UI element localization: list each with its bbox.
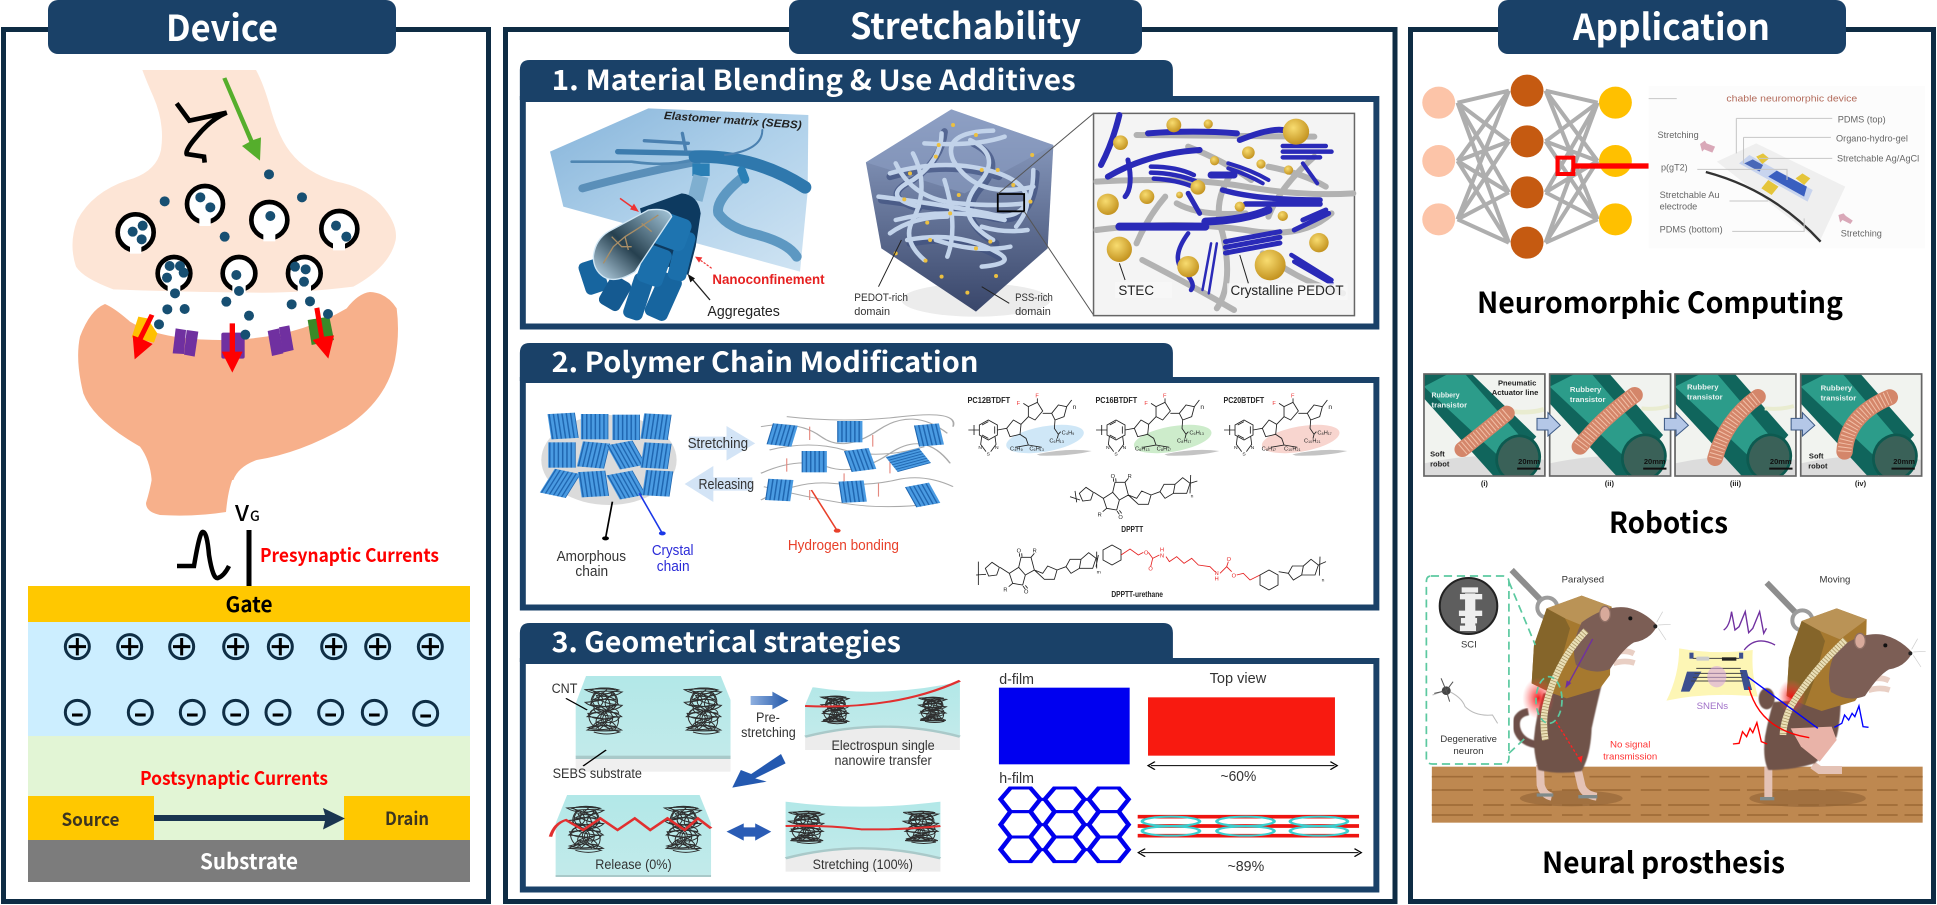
figure: crystalline PEDOT inset (1094, 113, 1354, 316)
photo iii (1675, 374, 1797, 486)
PC atoms: C₄H₉ (1010, 447, 1023, 453)
process labels: stretching (741, 724, 796, 740)
PC atoms: N (1123, 445, 1127, 451)
PC atoms: S (987, 452, 991, 458)
label: crystal chain: Crystal (652, 543, 694, 559)
film labels: d-film (999, 672, 1034, 688)
rat figure labels: Paralysed (1562, 574, 1604, 584)
layer: gate: Gate (226, 589, 272, 619)
DPPTT urethane: O (1227, 557, 1232, 563)
DPPTT urethane: N (1160, 553, 1164, 559)
rat figure labels: No signal (1610, 740, 1650, 750)
layer: substrate (28, 840, 470, 882)
signal traces and arrows (1724, 612, 1869, 744)
figure: film comparison (999, 688, 1361, 862)
heading: neuromorphic computing: Neuromorphic Computing (1477, 280, 1843, 322)
robot labels: Rubbery (1570, 385, 1602, 394)
label: postsynaptic currents: Postsynaptic Currents (140, 764, 328, 791)
panel: device (4, 0, 488, 902)
PC atoms: C₄H₉ (1062, 430, 1074, 436)
label: SEBS: Elastomer matrix (SEBS) (664, 110, 802, 132)
PC atoms: N (995, 445, 999, 451)
rat: paralysed (1512, 570, 1671, 797)
heading: device: Device (166, 0, 278, 52)
rat: moving (1759, 583, 1926, 799)
robot labels: 20mm (1518, 457, 1540, 466)
heading: robotics: Robotics (1609, 500, 1728, 542)
DPPTT urethane (976, 545, 1326, 595)
SCI inset: SCI (1461, 640, 1477, 650)
robot labels: Rubbery (1432, 390, 1460, 399)
figure: PEDOT cube (866, 109, 1094, 317)
figure: stretchable neuromorphic device: Stretching (1841, 228, 1882, 238)
figure: polymer structures (968, 394, 1347, 595)
photo i (1424, 374, 1546, 487)
PC atoms: S (1114, 452, 1118, 458)
robot labels: transistor (1570, 395, 1606, 404)
labels: polymer names: DPPTT-urethane (1111, 590, 1163, 599)
robot labels: Pneumatic (1498, 378, 1536, 387)
figure: neural prosthesis (1426, 570, 1926, 823)
labels: polymer names: DPPTT (1121, 525, 1143, 534)
robot labels: (i) (1481, 479, 1488, 488)
process labels: CNT (552, 680, 578, 696)
cations (65, 635, 442, 659)
label: presynaptic currents: Presynaptic Currents (260, 541, 439, 568)
robot labels: Rubbery (1687, 382, 1719, 391)
robot labels: (iv) (1855, 479, 1867, 488)
DPPTT urethane: R (1033, 549, 1037, 555)
heading: application: Application (1572, 0, 1770, 51)
arrows: red ion flow (133, 307, 334, 373)
labels: polymer names: PC20BTDFT (1224, 396, 1264, 405)
DPPTT urethane: R (1003, 588, 1007, 594)
figure: stretchable neuromorphic device: Stretching (1658, 130, 1699, 140)
film labels: h-film (999, 771, 1034, 787)
DPPTT: n (1191, 494, 1194, 500)
DPPTT: R (1098, 513, 1102, 519)
panel: stretchability (506, 0, 1395, 902)
DPPTT: O (1118, 515, 1123, 521)
PC atoms: F (1291, 394, 1295, 400)
DPPTT: O (1111, 474, 1116, 480)
label: amorphous chain: chain (575, 564, 608, 580)
label: PEDOT domain line 2: domain (854, 306, 890, 318)
robot labels: Rubbery (1821, 384, 1853, 393)
process labels: SEBS substrate (553, 765, 642, 781)
heading: neural prosthesis: Neural prosthesis (1542, 840, 1785, 882)
figure: stretchable neuromorphic device: PDMS (top) (1838, 115, 1886, 125)
DPPTT urethane: O (1148, 566, 1153, 572)
subpanel: geometrical strategies (520, 621, 1376, 890)
subpanel: polymer chain modification (520, 341, 1376, 608)
PC atoms: C₆H₁₃ (1049, 438, 1064, 444)
layer: electrolyte (28, 622, 470, 736)
SCI inset, SNEN device and labels (1426, 574, 1869, 764)
PC atoms: C₈H₁₇ (1262, 447, 1276, 453)
figure: stretchable neuromorphic device (1649, 86, 1925, 248)
subheading 3: 3. Geometrical strategies (552, 621, 901, 661)
postsynaptic neuron (78, 292, 398, 480)
label: crystal chain (652, 543, 694, 575)
strategy subpanels (520, 59, 1376, 889)
diagram: synapse (72, 70, 398, 480)
figure: stretchable neuromorphic device: Stretchable Ag/AgCl (1837, 153, 1919, 163)
label: crystalline PEDOT: Crystalline PEDOT (1230, 282, 1344, 298)
label: STEC: STEC (1118, 282, 1154, 298)
figure: stretchable neuromorphic device: electrode (1660, 201, 1697, 211)
robot labels: (iii) (1730, 479, 1742, 488)
gate wire (246, 530, 252, 587)
DPPTT urethane: H (1215, 576, 1219, 582)
process labels: Electrospun single (831, 737, 935, 753)
label: amorphous chain: Amorphous (557, 549, 626, 565)
film labels: Top view (1210, 671, 1267, 687)
wooden floor (1432, 767, 1923, 823)
DPPTT urethane: H (1160, 548, 1164, 554)
label: hydrogen bonding: Hydrogen bonding (788, 538, 899, 554)
action potential icon (177, 103, 227, 163)
PC atoms: C₈H₁₇ (1317, 430, 1332, 436)
labels: polymer names: PC12BTDFT (967, 396, 1010, 405)
heading: stretchability (789, 0, 1142, 54)
robot labels: robot (1808, 461, 1828, 470)
PC atoms: N (978, 445, 982, 451)
robot labels: 20mm (1644, 457, 1666, 466)
robot labels: transistor (1687, 392, 1723, 401)
DPPTT urethane: m (1097, 569, 1101, 575)
SNEN device (1666, 648, 1758, 701)
PC unit ovals and shadows (1004, 420, 1347, 458)
label: gate voltage (234, 496, 260, 528)
PC atoms: N (1234, 445, 1238, 451)
label: gate voltage: G (250, 506, 260, 526)
SCI inset (1426, 576, 1562, 764)
process labels: nanowire transfer (834, 752, 932, 768)
PC atoms: C₆H₁₃ (1029, 447, 1044, 453)
anions (65, 700, 438, 725)
layer: channel (28, 736, 470, 840)
label: PSS domain line 2: domain (1015, 306, 1051, 318)
robot labels: transistor (1821, 394, 1856, 403)
arrow: green signal (222, 77, 261, 161)
photo iv (1801, 374, 1923, 486)
DPPTT urethane: O (1232, 574, 1237, 580)
PC atoms (978, 394, 1332, 458)
sequence arrows (1537, 413, 1815, 436)
robot labels: (ii) (1605, 479, 1615, 488)
presynaptic neuron (72, 70, 396, 293)
label: PSS domain: PSS-rich (1015, 292, 1053, 304)
PC atoms: C₆H₁₃ (1135, 447, 1150, 453)
robot labels: Actuator line (1492, 388, 1538, 397)
layer: gate (28, 586, 470, 622)
label: releasing: Releasing (699, 477, 754, 493)
PC atoms: C₈H₁₇ (1157, 447, 1171, 453)
film labels (999, 671, 1267, 875)
electrode: drain: Drain (385, 805, 429, 831)
process labels (552, 680, 935, 872)
figure: stretchable neuromorphic device: chable neuromorphic device (1726, 94, 1857, 104)
figure: SEBS box (550, 108, 808, 323)
figure: stretchable neuromorphic device: Organo-hydro-gel (1836, 133, 1908, 143)
SCI inset: Degenerative (1440, 734, 1497, 744)
PC atoms: n (1200, 404, 1204, 411)
electrode: source: Source (62, 806, 120, 832)
PC atoms: n (1073, 404, 1077, 411)
labels: polymer names (967, 396, 1264, 599)
robot labels: Soft (1809, 452, 1824, 461)
PC atoms: S (1242, 452, 1246, 458)
label: amorphous chain (557, 549, 626, 580)
icon: presynaptic spike (177, 532, 229, 578)
PC atoms: C₈H₁₇ (1177, 438, 1191, 444)
photo ii (1550, 374, 1672, 486)
layer: substrate: Substrate (200, 846, 298, 876)
electrode: source (28, 796, 154, 840)
process labels: Release (0%) (595, 856, 672, 872)
rat figure labels: Moving (1820, 574, 1850, 584)
figure: stretchable neuromorphic device: PDMS (bottom) (1660, 225, 1723, 235)
figure: stretchable neuromorphic device: Stretchable Au (1660, 190, 1720, 200)
PC atoms: F (1017, 401, 1021, 407)
DPPTT urethane: N (1215, 571, 1219, 577)
panel: application (1410, 0, 1934, 902)
process labels: Stretching (100%) (813, 856, 913, 872)
DPPTT urethane: n (1322, 578, 1325, 584)
DPPTT urethane: O (1144, 550, 1149, 556)
DPPTT urethane: O (1024, 589, 1029, 595)
robot labels: 20mm (1770, 457, 1792, 466)
figure: chain stretching (540, 413, 954, 540)
receptors (132, 317, 334, 359)
SCI inset: neuron (1453, 746, 1484, 756)
electrode: drain (344, 796, 470, 840)
neurotransmitters (128, 169, 351, 340)
DPPTT (1070, 474, 1197, 521)
PC atoms: N (1106, 445, 1110, 451)
PC atoms: F (1272, 401, 1276, 407)
heading: application (1498, 0, 1846, 54)
scale bars (1517, 466, 1915, 472)
figure: CNT nanowire process (550, 675, 960, 877)
robot labels: Soft (1430, 450, 1445, 459)
heading: device (48, 0, 396, 54)
label: gate voltage: V (234, 496, 250, 528)
robot labels: robot (1430, 459, 1450, 468)
PC backbones (968, 398, 1327, 452)
synaptic vesicles (118, 186, 357, 293)
figure: stretchable neuromorphic device: p(gT2) (1661, 162, 1688, 172)
arrow: source to drain (154, 808, 345, 830)
PC atoms: F (1163, 394, 1167, 400)
robot labels: 20mm (1893, 457, 1915, 466)
film labels: ~89% (1228, 859, 1264, 875)
subheading 1: 1. Material Blending & Use Additives (552, 59, 1076, 99)
rat figure labels: SNENs (1697, 701, 1729, 711)
rat figure labels (1562, 574, 1850, 762)
PC atoms: F (1144, 401, 1148, 407)
label: PEDOT domain: PEDOT-rich (854, 292, 908, 304)
robot labels (1430, 378, 1915, 488)
PC atoms: C₆H₁₃ (1189, 430, 1204, 436)
figure: neural network (1422, 75, 1649, 259)
process labels: Pre- (756, 709, 780, 725)
PC atoms: C₁₀H₂₁ (1304, 438, 1321, 444)
PC atoms: N (1251, 445, 1255, 451)
PC atoms: n (1328, 404, 1332, 411)
labels: polymer names: PC16BTDFT (1096, 396, 1137, 405)
figure: soft robot sequence (1424, 374, 1923, 488)
DPPTT urethane: O (1017, 549, 1022, 555)
rat figure labels: transmission (1603, 752, 1657, 762)
subpanel: material blending (520, 59, 1376, 326)
PC atoms: F (1035, 394, 1039, 400)
label: nanoconfinement: Nanoconfinement (712, 271, 825, 287)
subheading 2: 2. Polymer Chain Modification (552, 341, 978, 381)
label: stretching: Stretching (688, 436, 748, 452)
robot labels: transistor (1432, 400, 1467, 409)
neuron stem (146, 478, 233, 516)
label: crystal chain: chain (657, 559, 690, 575)
film labels: ~60% (1221, 769, 1256, 785)
PC atoms: C₁₀H₂₁ (1284, 447, 1301, 453)
DPPTT: R (1128, 474, 1132, 480)
label: aggregates: Aggregates (707, 304, 780, 320)
